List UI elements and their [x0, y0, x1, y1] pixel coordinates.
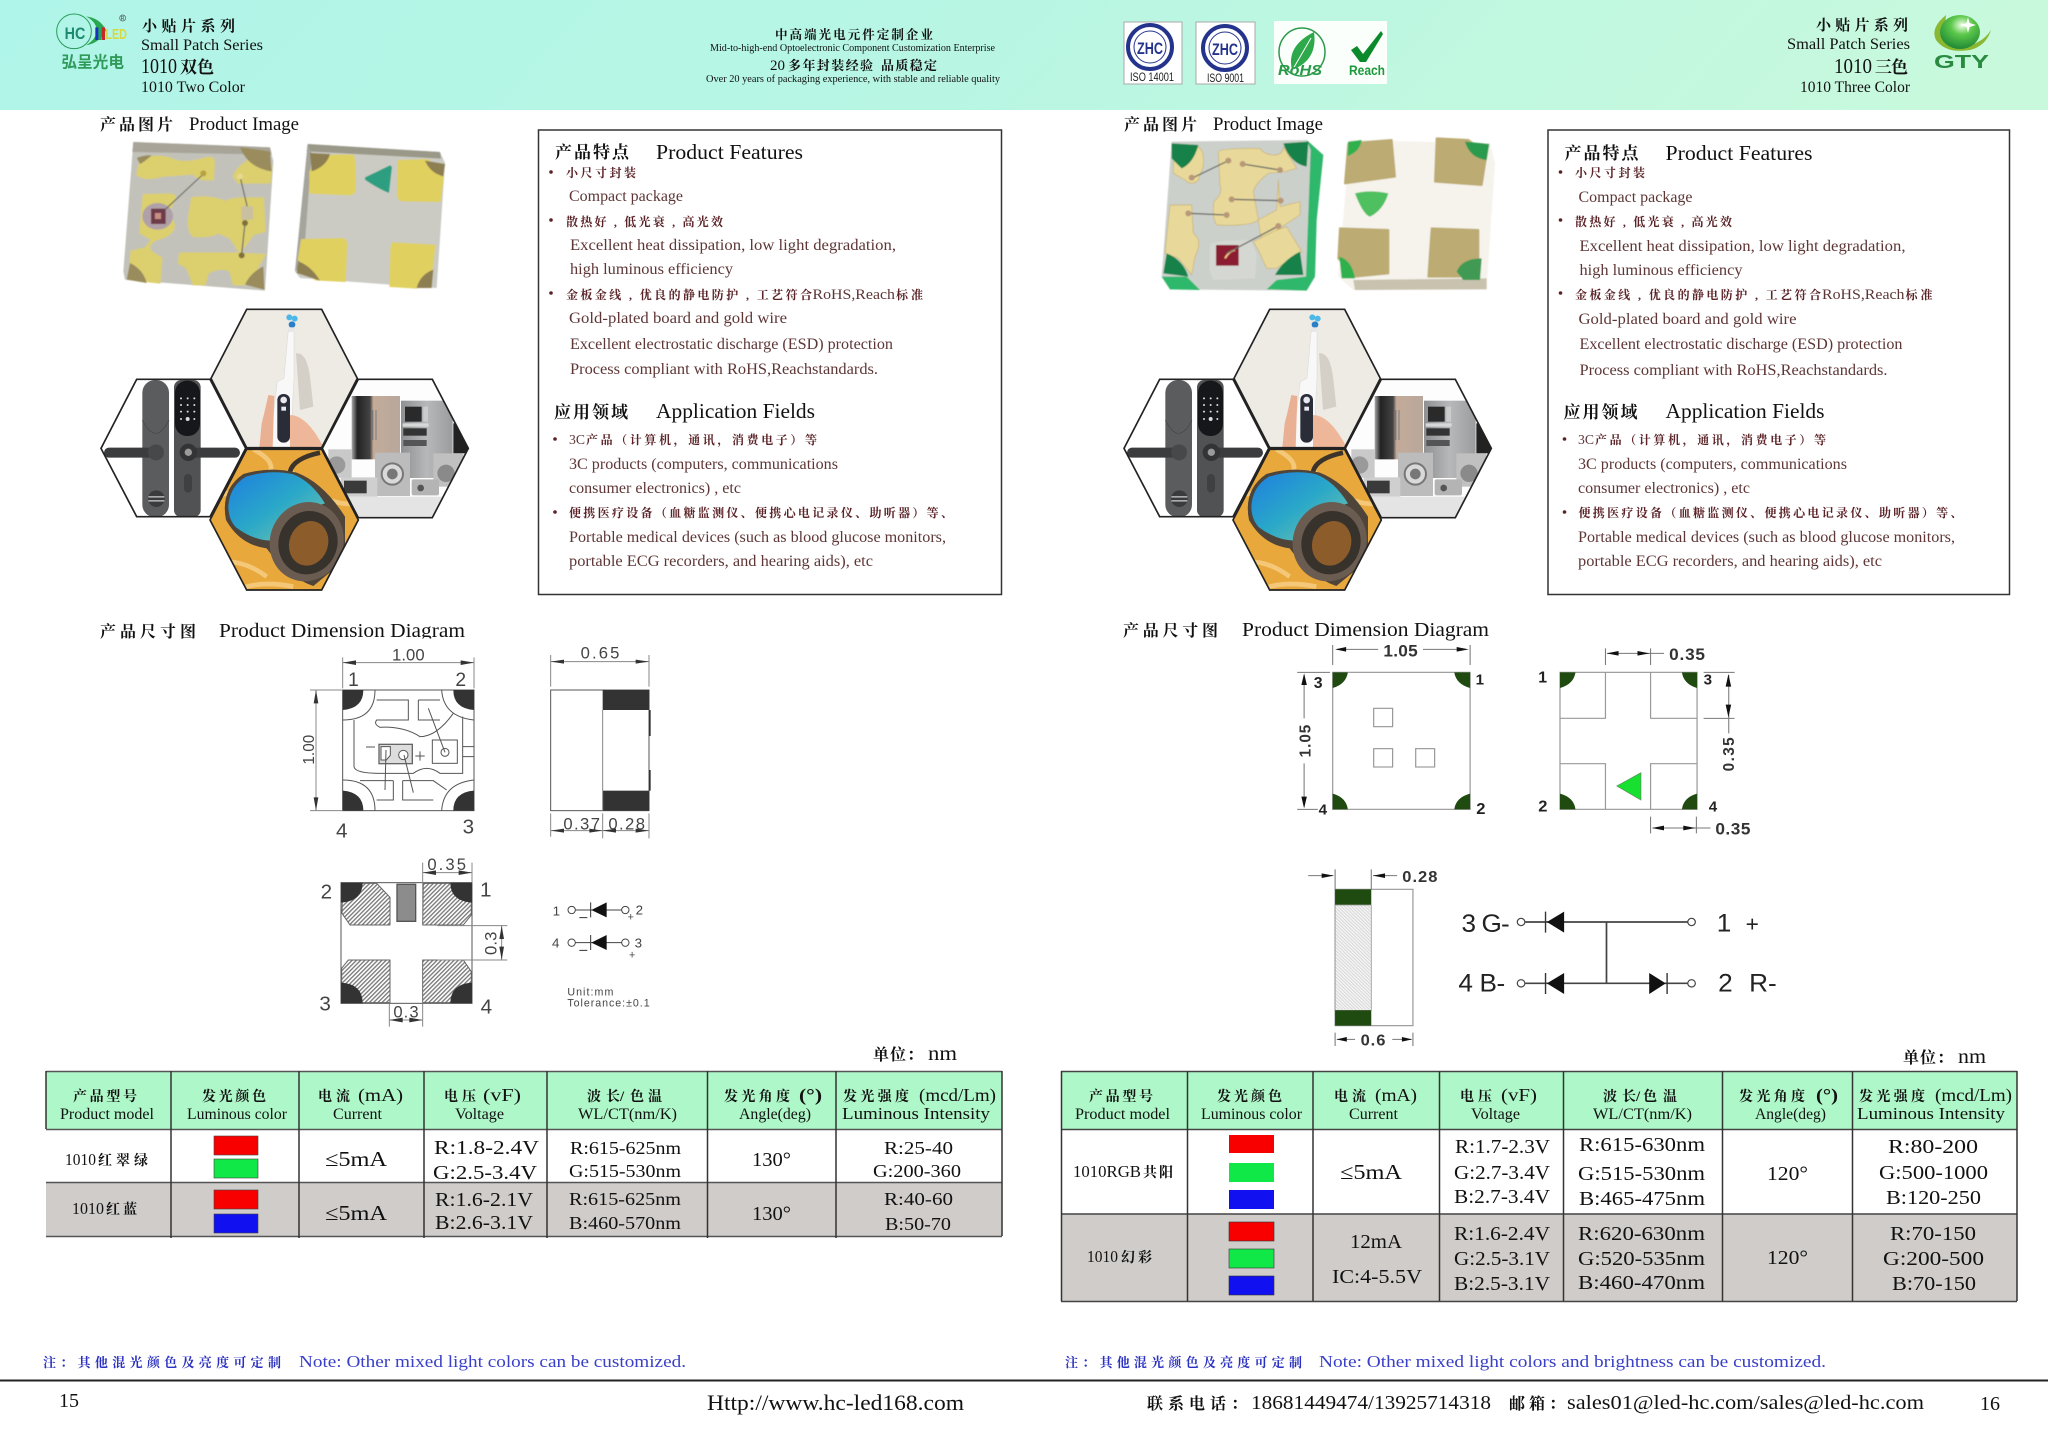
top view: 3 — [463, 815, 474, 838]
icon: RoHS and Reach: RoHS — [1278, 62, 1322, 79]
feature list: Compact package — [1578, 189, 1692, 206]
series title: 双色 — [180, 57, 214, 77]
row: 1010 RGB common anode: R:615-630nm — [1579, 1134, 1705, 1156]
heading: dimension diagram left: 产品尺寸图 — [100, 622, 196, 641]
application list: 3C — [569, 433, 585, 448]
header tagline: Mid-to-high-end Optoelectronic Component Customization Enterprise — [710, 43, 995, 54]
table header — [60, 1085, 996, 1123]
table header: (vF) — [483, 1085, 521, 1106]
row: 1010 red emerald: 130° — [752, 1149, 791, 1171]
icon: ISO 9001 — [1196, 22, 1255, 85]
icon: HC LED logo: 弘呈光电 — [61, 53, 124, 71]
side view: 0.37 — [563, 814, 600, 833]
table header: 波长 — [1603, 1088, 1636, 1105]
table header: 产品型号 — [73, 1088, 137, 1105]
application list: portable ECG recorders, and hearing aids), etc — [1578, 553, 1882, 570]
heading: application fields: 应用领域 — [554, 402, 628, 422]
feature list: 小尺寸封装 — [1575, 165, 1645, 180]
row: 1010 RGB common anode: 1010RGB — [1073, 1162, 1141, 1181]
row: 1010 red emerald: 1010 — [65, 1150, 96, 1169]
application list: Portable medical devices (such as blood glucose monitors, — [569, 529, 946, 546]
heading: product image right — [1124, 114, 1323, 135]
unit label left: nm — [928, 1043, 957, 1065]
table header: WL/CT(nm/K) — [1593, 1106, 1692, 1123]
photo: bluetooth speaker — [210, 449, 358, 592]
hexagon outlines — [101, 309, 468, 590]
header tagline: Over 20 years of packaging experience, with stable and reliable quality — [706, 74, 1001, 85]
series title: Small Patch Series — [141, 37, 263, 54]
row: 1010 red blue: R:615-625nm — [569, 1189, 681, 1209]
row: 1010 RGB common anode: R:1.7-2.3V — [1455, 1136, 1551, 1158]
row: 1010 red emerald: R:615-625nm — [570, 1138, 681, 1158]
table header: Luminous color — [1201, 1106, 1303, 1123]
row: 1010 red blue — [72, 1189, 953, 1234]
table header: 发光角度 — [1739, 1088, 1805, 1105]
heading: product features: Product Features — [656, 140, 803, 164]
circuit symbol: + — [1746, 912, 1759, 936]
table header — [1075, 1085, 2012, 1123]
application list — [1563, 432, 1962, 570]
footer rule — [0, 1380, 2048, 1382]
note left — [43, 1352, 686, 1371]
left header — [57, 14, 263, 96]
icon: ISO 14001 — [1124, 22, 1182, 84]
row: 1010 red emerald: 红翠绿 — [98, 1153, 148, 1169]
note left: Note: Other mixed light colors can be customized. — [299, 1352, 686, 1371]
row: 1010 phantom color: 120° — [1767, 1247, 1808, 1269]
circuit symbol: 1 — [553, 903, 560, 918]
heading: product features: 产品特点 — [555, 142, 630, 162]
table header: (vF) — [1501, 1085, 1537, 1106]
top view: 3 — [1314, 675, 1323, 692]
heading: product image left — [100, 114, 299, 135]
application list: consumer electronics) , etc — [1578, 480, 1750, 497]
heading: application fields: Application Fields — [1666, 399, 1824, 423]
bottom view: 0.35 — [1721, 737, 1738, 771]
panel: features left — [538, 130, 1002, 594]
row: 1010 RGB common anode: G:515-530nm — [1578, 1163, 1705, 1185]
table header: 电压 — [1460, 1088, 1492, 1105]
feature list: 散热好 , 低光衰 , 高光效 — [566, 214, 723, 229]
circuit symbol: 4 B- — [1458, 970, 1505, 997]
photo: toothbrush — [210, 308, 358, 448]
footer: 邮箱： — [1509, 1394, 1565, 1413]
certification badges — [1124, 21, 1387, 85]
bottom view: 0.35 — [1669, 645, 1705, 664]
side view: 0.6 — [1361, 1032, 1385, 1049]
series title: 1010 Two Color — [141, 79, 246, 96]
icon: ISO 9001: ISO 9001 — [1207, 71, 1244, 85]
footer: sales01@led-hc.com/sales@led-hc.com — [1567, 1392, 1924, 1414]
table header: 发光角度 — [724, 1088, 790, 1105]
heading: dimension diagram right — [1123, 619, 1489, 641]
application list: 3C products (computers, communications — [1578, 456, 1847, 473]
feature list: Gold-plated board and gold wire — [1578, 311, 1796, 328]
top view: 1 — [348, 670, 359, 691]
table: two color — [46, 1071, 1002, 1238]
top view: 4 — [1319, 803, 1328, 819]
top view: 1 — [1476, 673, 1484, 689]
hexagon application photos right — [1124, 308, 1493, 592]
table header: 发光颜色 — [202, 1088, 266, 1105]
chip top view — [1162, 140, 1323, 291]
series title: 小贴片系列 — [142, 17, 235, 35]
table header: Angle(deg) — [739, 1106, 811, 1123]
icon: RoHS and Reach — [1274, 21, 1387, 84]
row: 1010 red blue: 130° — [752, 1203, 791, 1225]
row: 1010 RGB common anode: G:2.7-3.4V — [1454, 1162, 1551, 1184]
application list: Portable medical devices (such as blood glucose monitors, — [1578, 529, 1955, 546]
icon: HC LED logo: LED — [105, 27, 127, 43]
series title — [141, 17, 263, 96]
table header: Current — [1349, 1106, 1399, 1123]
footer: 18681449474/13925714318 — [1251, 1392, 1491, 1414]
table header: Product model — [1075, 1106, 1171, 1123]
top view: 2 — [455, 670, 466, 691]
icon: GTY logo — [1934, 15, 1991, 72]
unit note: Tolerance:±0.1 — [567, 998, 650, 1010]
row: 1010 red emerald — [65, 1136, 961, 1184]
table header: (°) — [1816, 1085, 1838, 1106]
bottom view: 4 — [1709, 800, 1718, 815]
table header: Current — [333, 1106, 383, 1123]
heading: dimension diagram right: Product Dimension Diagram — [1242, 619, 1489, 641]
unit label left — [873, 1043, 957, 1065]
heading: dimension diagram left — [100, 620, 465, 642]
table header: WL/CT(nm/K) — [578, 1106, 677, 1123]
unit note — [567, 987, 650, 1010]
bottom view: 3 — [319, 993, 331, 1016]
feature list: Process compliant with RoHS,Reachstandards. — [1580, 362, 1888, 379]
table: three color — [1061, 1071, 2017, 1302]
bottom view: 4 — [481, 995, 492, 1018]
footer — [59, 1390, 2000, 1415]
heading: product features: 产品特点 — [1564, 143, 1640, 163]
hexagon application photos — [101, 308, 470, 592]
row: 1010 RGB common anode: G:500-1000 — [1879, 1162, 1988, 1184]
row: 1010 red emerald: ≤5mA — [325, 1147, 388, 1171]
table header: 发光强度 — [843, 1088, 909, 1105]
table header: 色温 — [1643, 1088, 1677, 1105]
application list: 产品（计算机，通讯，消费电子）等 — [586, 432, 817, 447]
row: 1010 red blue: 红蓝 — [106, 1201, 137, 1218]
row: 1010 phantom color: 12mA — [1350, 1231, 1403, 1253]
row: 1010 red emerald: R:1.8-2.4V — [434, 1137, 540, 1159]
chip bottom view — [1338, 138, 1495, 290]
side view: 0.65 — [581, 644, 619, 663]
icon: HC LED logo: R — [121, 16, 125, 22]
circuit symbol: 3 G- — [1461, 910, 1510, 938]
circuit symbol: + — [628, 912, 634, 924]
application list: 便携医疗设备（血糖监测仪、便携心电记录仪、助听器）等、 — [569, 505, 953, 520]
application list: portable ECG recorders, and hearing aids), etc — [569, 553, 873, 570]
table header: Angle(deg) — [1755, 1106, 1826, 1123]
feature list: Excellent heat dissipation, low light degradation, — [1580, 238, 1906, 255]
table header: Voltage — [1471, 1106, 1520, 1123]
side view — [1308, 868, 1437, 1049]
feature list: 散热好 , 低光衰 , 高光效 — [1575, 214, 1732, 229]
table header: 产品型号 — [1089, 1088, 1153, 1105]
row: 1010 phantom color: R:70-150 — [1890, 1223, 1976, 1245]
dimension 1.00: 1.00 — [392, 646, 425, 665]
feature list: Excellent electrostatic discharge (ESD) protection — [1580, 336, 1902, 353]
table header: Product model — [60, 1106, 155, 1123]
row: 1010 phantom color: G:200-500 — [1883, 1248, 1984, 1270]
application list: 便携医疗设备（血糖监测仪、便携心电记录仪、助听器）等、 — [1578, 505, 1962, 520]
heading: product features — [555, 140, 803, 164]
heading: product image left: Product Image — [189, 114, 299, 135]
row: 1010 phantom color — [1087, 1222, 1984, 1295]
table header: 发光强度 — [1859, 1088, 1925, 1105]
table header: 电压 — [444, 1088, 476, 1105]
row: 1010 red emerald: G:2.5-3.4V — [433, 1162, 538, 1184]
feature list: 小尺寸封装 — [566, 165, 636, 180]
top view: 1.05 — [1297, 724, 1314, 757]
heading: product features — [1564, 141, 1812, 165]
photo: home appliances — [322, 378, 470, 518]
photo: smart door lock — [101, 379, 246, 517]
top view — [1297, 642, 1486, 819]
series title — [1787, 16, 1911, 96]
dimension 1.00 — [301, 646, 474, 811]
footer: Http://www.hc-led168.com — [707, 1390, 964, 1415]
unit label right — [1903, 1046, 1986, 1068]
bottom view: 2 — [1538, 798, 1547, 815]
top view: 1.05 — [1383, 642, 1418, 661]
circuit symbol — [552, 902, 643, 961]
bottom view: 0.35 — [427, 855, 466, 874]
bottom view: 0.3 — [482, 932, 501, 955]
feature list: Gold-plated board and gold wire — [569, 310, 787, 327]
heading: product image left: 产品图片 — [100, 115, 173, 134]
icon: RoHS and Reach: Reach — [1349, 62, 1385, 78]
note right — [1065, 1352, 1826, 1371]
chip bottom view — [295, 144, 445, 288]
row: 1010 red blue: R:40-60 — [884, 1189, 953, 1209]
header band — [0, 0, 2048, 110]
row: 1010 phantom color: G:2.5-3.1V — [1454, 1248, 1551, 1270]
feature list: Compact package — [569, 188, 683, 205]
application list: 产品（计算机，通讯，消费电子）等 — [1595, 432, 1826, 447]
icon: ISO 14001: ISO 14001 — [1130, 70, 1174, 84]
top view: 4 — [336, 819, 347, 842]
header tagline: 20 — [770, 58, 785, 74]
feature list: RoHS,Reach — [1822, 287, 1905, 303]
series title: 1010 — [141, 54, 177, 78]
icon: HC LED logo — [57, 14, 127, 71]
top view — [336, 670, 474, 842]
application list: 3C products (computers, communications — [569, 456, 838, 473]
series title: 1010 — [1834, 54, 1872, 78]
row: 1010 red blue: 1010 — [72, 1199, 104, 1218]
heading: product image right: 产品图片 — [1124, 115, 1197, 134]
feature list: 金板金线 , 优良的静电防护 , 工艺符合 — [1575, 287, 1821, 302]
row: 1010 red emerald: G:200-360 — [873, 1161, 961, 1181]
row: 1010 RGB common anode — [1073, 1134, 1988, 1210]
diagram: right dimensions — [1297, 642, 1777, 1049]
row: 1010 RGB common anode: 共阳 — [1143, 1165, 1173, 1181]
icon: ISO 9001: ZHC — [1212, 40, 1238, 59]
table header: Voltage — [455, 1106, 504, 1123]
icon: HC LED logo: HC — [65, 24, 85, 43]
heading: application fields: 应用领域 — [1564, 402, 1638, 422]
row: 1010 red emerald: R:25-40 — [884, 1138, 953, 1158]
dimension 1.00: 1.00 — [301, 735, 318, 765]
row: 1010 phantom color: 幻彩 — [1121, 1249, 1152, 1266]
table header: / — [1635, 1089, 1641, 1105]
feature list — [1559, 165, 1932, 379]
footer: 16 — [1980, 1393, 2000, 1415]
row: 1010 red blue: B:50-70 — [885, 1214, 951, 1234]
feature list: high luminous efficiency — [1580, 262, 1742, 279]
application list: 3C — [1578, 433, 1594, 448]
row: 1010 red blue: B:460-570nm — [569, 1213, 681, 1233]
icon: ISO 14001: ZHC — [1137, 39, 1163, 58]
feature list: 标准 — [896, 287, 923, 302]
table header: Luminous color — [187, 1106, 288, 1123]
row: 1010 phantom color: 1010 — [1087, 1247, 1118, 1266]
row: 1010 red blue: R:1.6-2.1V — [435, 1189, 534, 1211]
side view: 0.28 — [1402, 868, 1437, 886]
table header: (mcd/Lm) — [1935, 1085, 2012, 1106]
bottom view: 0.3 — [393, 1002, 419, 1021]
row: 1010 phantom color: G:520-535nm — [1578, 1248, 1705, 1270]
table header: (°) — [799, 1085, 822, 1106]
table header: Luminous Intensity — [842, 1104, 991, 1123]
heading: product features: Product Features — [1666, 141, 1812, 165]
footer: 15 — [59, 1390, 79, 1412]
top view: 2 — [1476, 800, 1486, 818]
chip top view — [123, 142, 273, 291]
row: 1010 phantom color: R:1.6-2.4V — [1454, 1223, 1551, 1245]
header tagline: 品质稳定 — [881, 58, 937, 73]
row: 1010 red emerald: G:515-530nm — [569, 1161, 681, 1181]
header tagline — [706, 27, 1001, 85]
row: 1010 RGB common anode: B:465-475nm — [1579, 1188, 1705, 1210]
circuit symbol: 2 — [636, 903, 643, 918]
header tagline: 多年封装经验 — [788, 58, 873, 73]
circuit symbol: 4 — [552, 935, 560, 950]
feature list: Excellent heat dissipation, low light degradation, — [570, 237, 896, 254]
photo: two color chips — [123, 142, 445, 291]
table header: 发光颜色 — [1217, 1088, 1282, 1105]
row: 1010 red blue: ≤5mA — [325, 1201, 388, 1225]
panel: features right — [1548, 130, 2010, 594]
table header: (mA) — [358, 1085, 403, 1106]
row: 1010 RGB common anode: 120° — [1767, 1163, 1808, 1185]
table header: (mA) — [1375, 1085, 1417, 1106]
heading: dimension diagram right: 产品尺寸图 — [1123, 621, 1218, 640]
circuit symbol: 1 — [1717, 910, 1731, 937]
row: 1010 red blue: B:2.6-3.1V — [435, 1212, 534, 1234]
header tagline: 中高端光电元件定制企业 — [775, 27, 933, 42]
table header: / — [619, 1089, 625, 1105]
row: 1010 RGB common anode: B:2.7-3.4V — [1454, 1186, 1551, 1208]
unit note: Unit:mm — [567, 987, 613, 999]
bottom view: 3 — [1704, 673, 1712, 689]
row: 1010 phantom color: B:460-470nm — [1578, 1272, 1705, 1294]
circuit symbol — [1458, 910, 1777, 997]
heading: application fields — [1564, 399, 1824, 423]
bottom view — [1538, 645, 1750, 839]
unit label left: 单位： — [873, 1046, 923, 1064]
series title: 1010 Three Color — [1800, 79, 1911, 96]
side view: 0.28 — [608, 814, 645, 833]
feature list: 金板金线 , 优良的静电防护 , 工艺符合 — [566, 287, 812, 302]
table header: 色温 — [630, 1088, 662, 1105]
row: 1010 phantom color: B:70-150 — [1892, 1273, 1976, 1295]
diagram: left dimensions — [301, 644, 651, 1027]
heading: dimension diagram left: Product Dimension Diagram — [219, 620, 465, 642]
row: 1010 phantom color: R:620-630nm — [1578, 1223, 1705, 1245]
table header: 波长 — [587, 1088, 620, 1105]
table header: (mcd/Lm) — [919, 1085, 996, 1106]
application list — [553, 432, 953, 570]
circuit symbol: + — [629, 949, 635, 961]
bottom view: 1 — [1538, 670, 1547, 687]
series title: 三色 — [1875, 57, 1908, 77]
circuit symbol: R- — [1749, 970, 1777, 997]
table header: Luminous Intensity — [1857, 1104, 2006, 1123]
photo: three color chips — [1162, 138, 1495, 291]
feature list: 标准 — [1906, 287, 1932, 302]
heading: application fields — [554, 399, 815, 423]
row: 1010 phantom color: B:2.5-3.1V — [1454, 1273, 1551, 1295]
bottom view: 1 — [480, 879, 491, 902]
bottom view: 0.35 — [1715, 820, 1750, 839]
heading: product image right: Product Image — [1213, 114, 1323, 135]
right header — [1787, 15, 1991, 96]
table header: 电流 — [318, 1088, 351, 1105]
unit label right: nm — [1958, 1046, 1986, 1068]
series title: 小贴片系列 — [1816, 16, 1908, 34]
row: 1010 phantom color: IC:4-5.5V — [1332, 1266, 1423, 1288]
circuit symbol: 2 — [1718, 970, 1733, 997]
heading: application fields: Application Fields — [656, 399, 815, 423]
bottom view — [319, 855, 507, 1027]
note right: 注：其他混光颜色及亮度可定制 — [1065, 1355, 1302, 1371]
circuit symbol: 3 — [635, 935, 642, 950]
series title: Small Patch Series — [1787, 36, 1910, 53]
feature list: high luminous efficiency — [570, 261, 733, 278]
feature list: Process compliant with RoHS,Reachstandards. — [570, 361, 878, 378]
feature list: RoHS,Reach — [812, 287, 896, 303]
application list: consumer electronics) , etc — [569, 480, 741, 497]
note left: 注：其他混光颜色及亮度可定制 — [43, 1355, 281, 1371]
note right: Note: Other mixed light colors and brightness can be customized. — [1319, 1352, 1826, 1371]
feature list: Excellent electrostatic discharge (ESD) protection — [570, 336, 893, 353]
icon: GTY logo: GTY — [1934, 51, 1990, 72]
table header: 电流 — [1334, 1088, 1367, 1105]
side view — [551, 644, 651, 838]
feature list — [549, 165, 923, 378]
row: 1010 RGB common anode: R:80-200 — [1888, 1136, 1978, 1158]
row: 1010 RGB common anode: B:120-250 — [1886, 1187, 1981, 1209]
bottom view: 2 — [321, 880, 332, 903]
unit label right: 单位： — [1903, 1049, 1953, 1067]
row: 1010 RGB common anode: ≤5mA — [1340, 1160, 1403, 1184]
footer: 联系电话： — [1147, 1394, 1247, 1413]
